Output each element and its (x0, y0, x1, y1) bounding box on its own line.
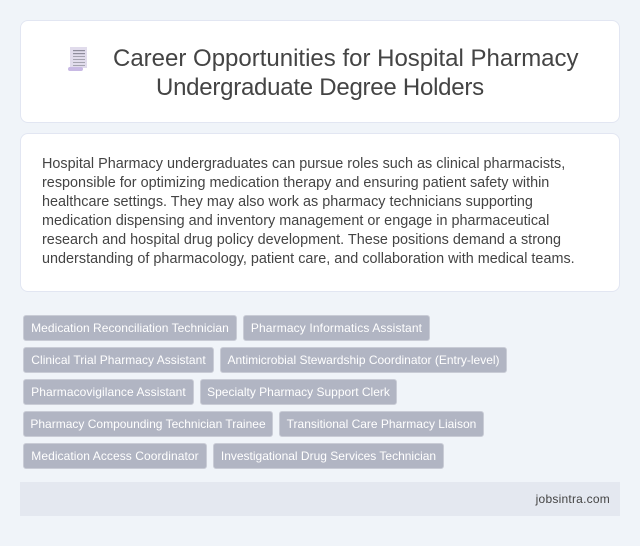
tag: Antimicrobial Stewardship Coordinator (Entry-level) (227, 353, 500, 367)
tag: Medication Access Coordinator (31, 449, 199, 463)
tag (23, 443, 207, 469)
tag: Clinical Trial Pharmacy Assistant (31, 353, 206, 367)
description text: medication dispensing and inventory management or engage in pharmaceutical (42, 213, 549, 229)
panel: title card (20, 20, 620, 123)
icon: pharmacy receipt scroll (68, 47, 87, 71)
tag (200, 379, 397, 405)
tag (213, 443, 444, 469)
tag: Pharmacy Informatics Assistant (251, 321, 422, 335)
title line 1: Career Opportunities for Hospital Pharmacy (113, 45, 579, 72)
tag (243, 315, 430, 341)
tag: Pharmacovigilance Assistant (31, 385, 186, 399)
footer bar (20, 482, 620, 516)
description text (42, 156, 575, 267)
description text: research and hospital drug policy development. These positions demand a strong (42, 232, 561, 248)
tag (220, 347, 507, 373)
tag (23, 411, 273, 437)
tag: Pharmacy Compounding Technician Trainee (30, 417, 266, 431)
tag: Medication Reconciliation Technician (31, 321, 229, 335)
tag: Specialty Pharmacy Support Clerk (207, 385, 390, 399)
description text: responsible for optimizing medication therapy and ensuring patient safety within (42, 175, 549, 191)
tag: Transitional Care Pharmacy Liaison (287, 417, 476, 431)
panel: description card (20, 133, 620, 292)
tag (23, 379, 194, 405)
tag (23, 315, 237, 341)
tag (279, 411, 484, 437)
tag (23, 347, 214, 373)
description text: healthcare settings. They may also work as pharmacy technicians supporting (42, 194, 533, 210)
tag: Investigational Drug Services Technician (221, 449, 436, 463)
title line 2: Undergraduate Degree Holders (156, 74, 484, 101)
footer source: jobsintra.com (536, 492, 610, 506)
description text: understanding of pharmacology, patient care, and collaboration with medical teams. (42, 251, 575, 267)
description text: Hospital Pharmacy undergraduates can pursue roles such as clinical pharmacists, (42, 156, 565, 172)
